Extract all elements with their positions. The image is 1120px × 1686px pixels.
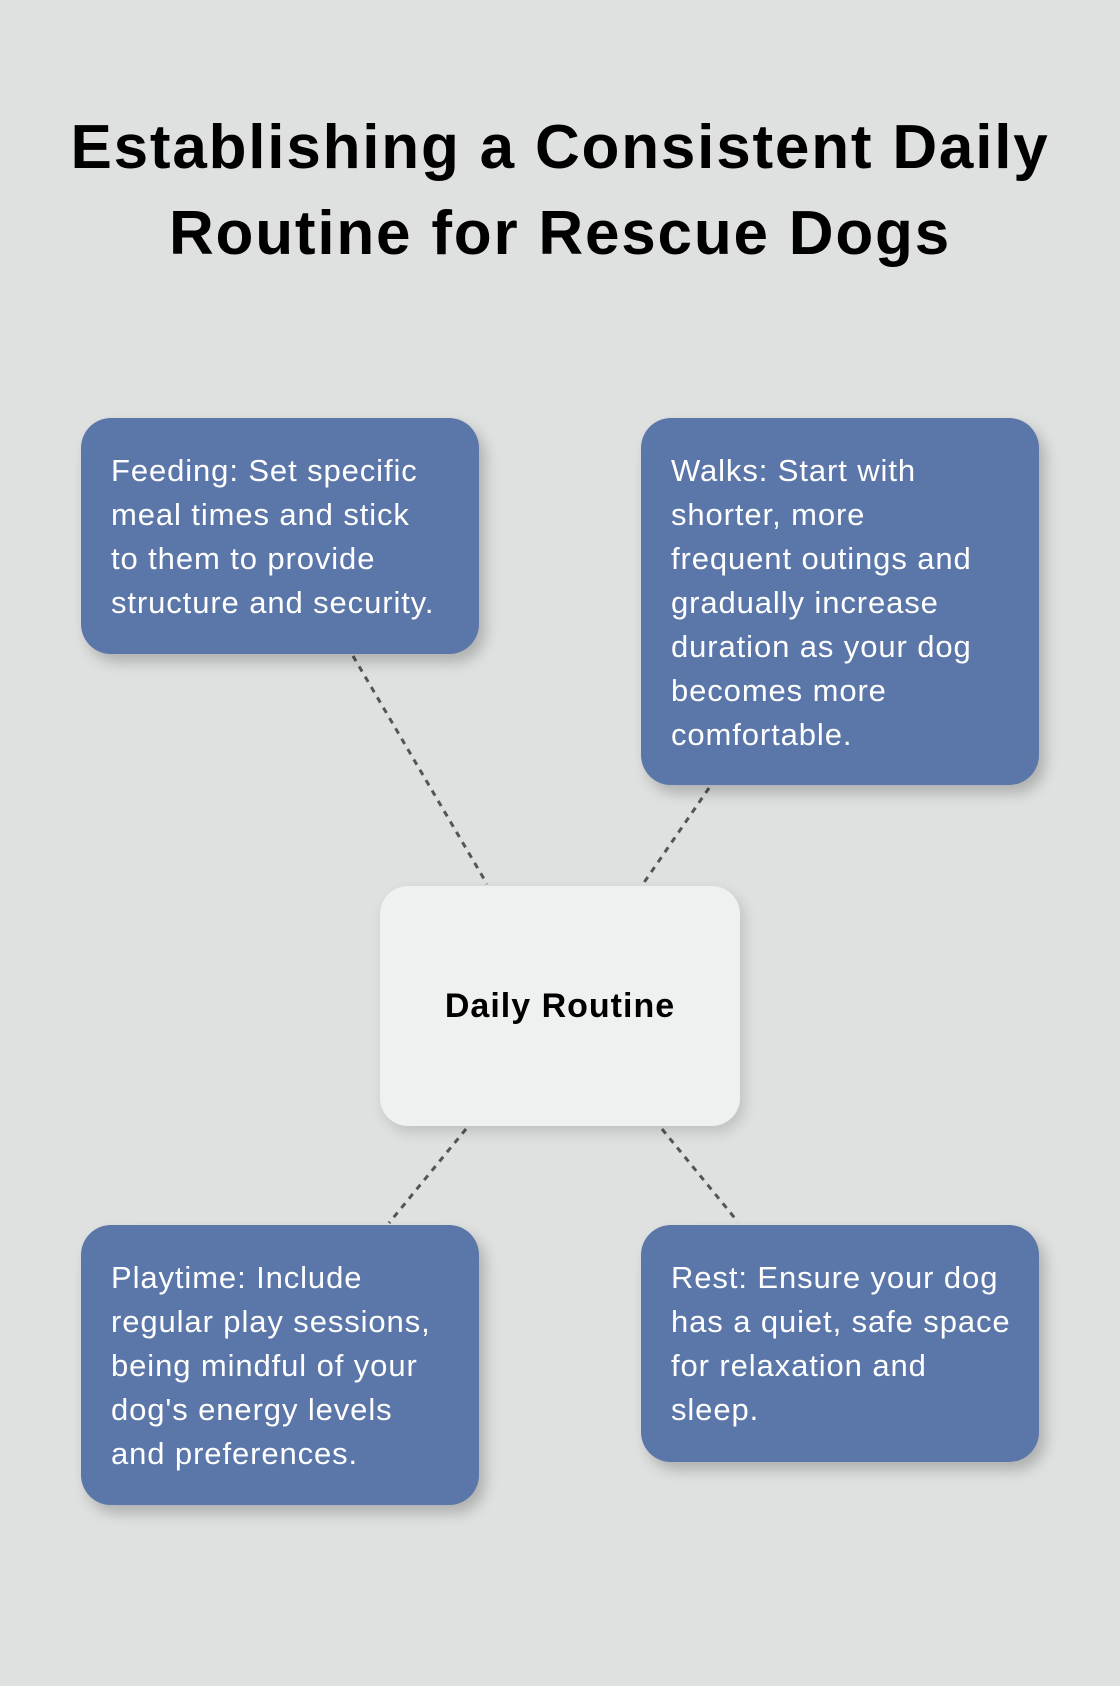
panel: playtime: dog's energy levels	[111, 1392, 393, 1427]
title: Routine for Rescue Dogs	[169, 199, 951, 268]
panel: walks: gradually increase	[671, 585, 939, 620]
panel: walks: frequent outings and	[671, 541, 972, 576]
panel: playtime: Playtime: Include	[111, 1260, 362, 1295]
panel: rest	[641, 1225, 1039, 1462]
title	[70, 113, 1050, 268]
panel: playtime	[81, 1225, 479, 1505]
center node: Daily Routine	[445, 986, 675, 1024]
panel: feeding: to them to provide	[111, 541, 375, 576]
panel: rest: for relaxation and	[671, 1348, 927, 1383]
panel: rest: Rest: Ensure your dog	[671, 1260, 998, 1295]
center node	[380, 886, 740, 1126]
panel: walks: shorter, more	[671, 497, 865, 532]
panel: feeding: Feeding: Set specific	[111, 453, 418, 488]
panel: playtime: and preferences.	[111, 1436, 358, 1471]
panel: playtime: regular play sessions,	[111, 1304, 431, 1339]
title: Establishing a Consistent Daily	[70, 113, 1050, 182]
panel: walks	[641, 418, 1039, 785]
panel: rest: sleep.	[671, 1392, 759, 1427]
panel: feeding: structure and security.	[111, 585, 434, 620]
panel: playtime: being mindful of your	[111, 1348, 418, 1383]
panel: rest: has a quiet, safe space	[671, 1304, 1011, 1339]
panel: feeding: meal times and stick	[111, 497, 410, 532]
panel: walks: becomes more	[671, 673, 887, 708]
panel: walks: comfortable.	[671, 717, 852, 752]
panel: walks: Walks: Start with	[671, 453, 916, 488]
panel: feeding	[81, 418, 479, 654]
panel: walks: duration as your dog	[671, 629, 972, 664]
